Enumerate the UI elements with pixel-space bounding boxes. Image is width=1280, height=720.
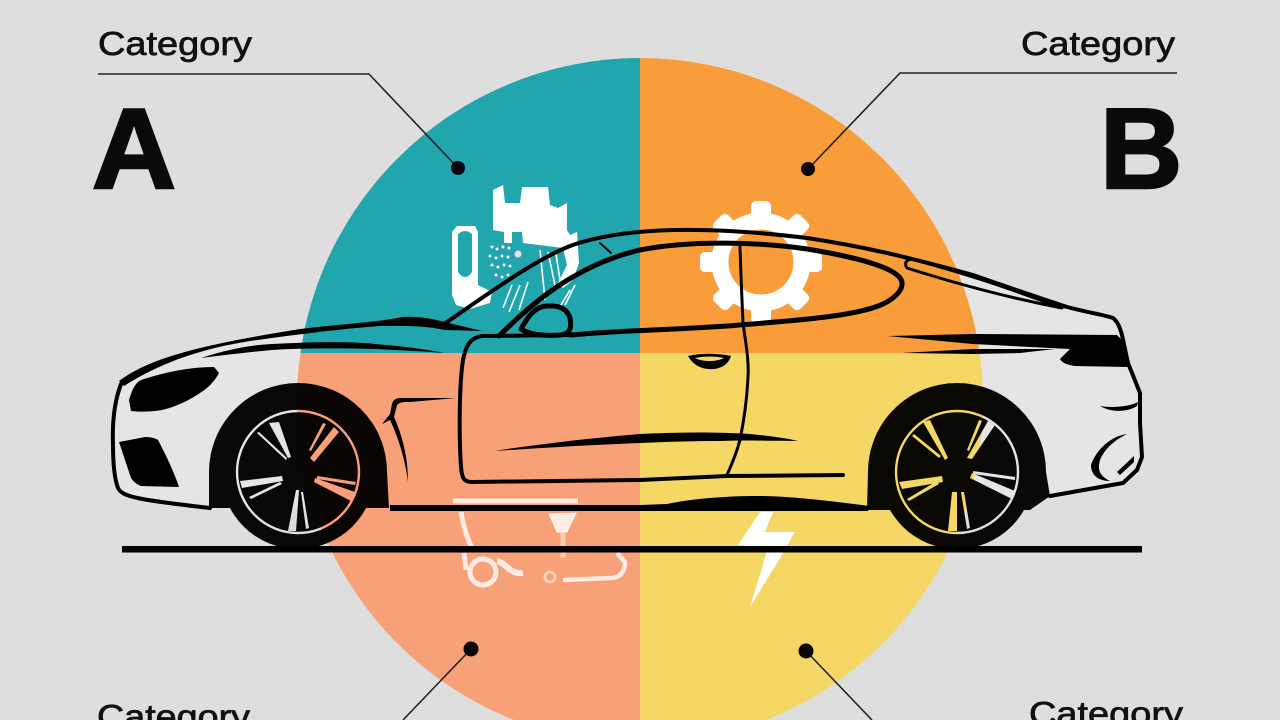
callout: category A <box>92 25 465 213</box>
rear end line <box>1050 335 1142 496</box>
bumper crease <box>1100 402 1138 411</box>
door rear edge <box>727 247 748 475</box>
dot A <box>451 161 465 175</box>
headlight <box>129 367 219 412</box>
front intake <box>119 437 179 487</box>
label: Category top left: Category <box>98 25 253 62</box>
tail light <box>888 334 1128 367</box>
quadrant: orange <box>640 58 979 353</box>
leader line B <box>808 73 1177 169</box>
icon: gear <box>700 201 822 323</box>
hood crease <box>201 342 444 358</box>
sill <box>390 496 870 511</box>
door front and sill <box>460 335 843 482</box>
quadrant: yellow <box>640 353 1000 720</box>
dot bottom right <box>798 644 814 658</box>
letter A: A <box>92 86 176 213</box>
rear reflector <box>1091 434 1134 481</box>
quadrant circle <box>280 40 1000 720</box>
quadrant: salmon <box>280 353 640 720</box>
dot bottom left <box>464 642 478 656</box>
leader line A <box>98 74 458 168</box>
dot B <box>801 162 815 176</box>
mirror <box>521 306 571 335</box>
door handle <box>688 354 731 369</box>
callout: category bottom right <box>798 644 1184 720</box>
side crease <box>494 432 798 451</box>
a-pillar notch <box>600 243 611 253</box>
wheels <box>209 383 1050 549</box>
leader line bottom right <box>806 651 872 720</box>
label: Category top right: Category <box>1021 25 1176 62</box>
rear glass <box>906 259 1062 308</box>
rear wheel <box>867 383 1050 549</box>
leader line bottom left <box>403 649 471 720</box>
icon: engine and tool <box>452 185 579 312</box>
car outline <box>113 230 1142 511</box>
callout: category B <box>801 25 1182 213</box>
window line <box>499 243 902 336</box>
ground line <box>122 546 1142 552</box>
fender line <box>382 398 456 482</box>
hood line <box>119 317 482 386</box>
lower tail streak <box>902 349 1055 354</box>
quadrant: teal <box>300 58 640 353</box>
callout: category bottom left <box>97 642 478 720</box>
icon: faded tool cart <box>453 501 625 585</box>
front wheel <box>209 383 389 549</box>
icon: lightning bolt <box>738 512 795 607</box>
roofline <box>441 230 1122 335</box>
letter B: B <box>1100 86 1182 213</box>
car body silhouette fill <box>113 230 1142 510</box>
front face line <box>113 384 210 508</box>
